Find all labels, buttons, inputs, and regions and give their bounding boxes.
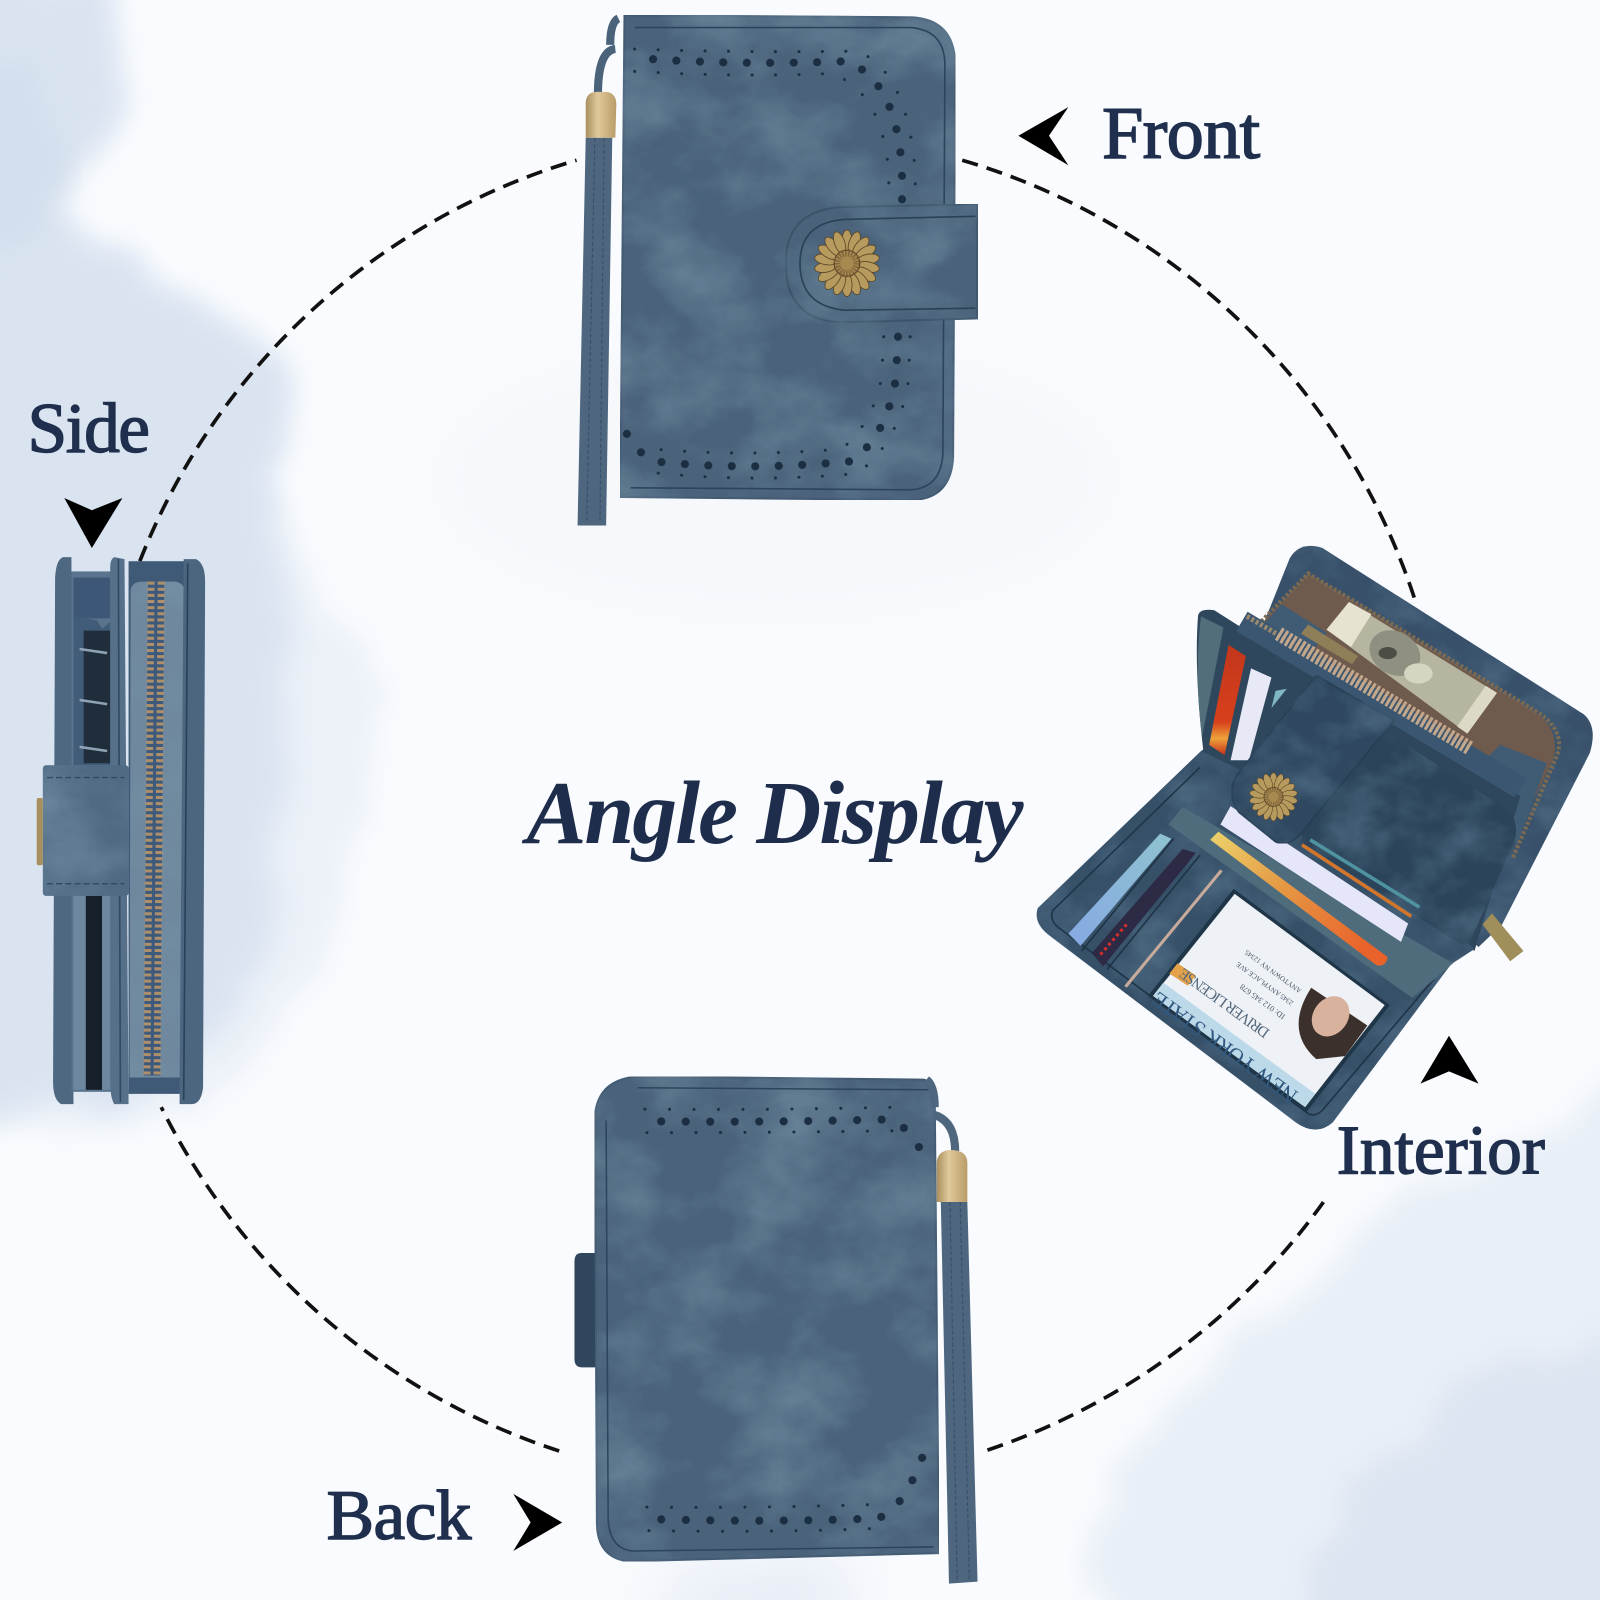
inner zipper band [1242,616,1520,788]
lower panel [1037,751,1474,1130]
closure tab [43,765,129,896]
label: Interior: Interior [1337,1112,1545,1189]
ID window: ANYTOWN NY 12345 [1243,948,1303,995]
wrist strap [927,1080,978,1584]
zip gusset [129,561,188,1094]
ID window: ID: 012 345 678 [1238,982,1287,1021]
sunflower button [814,230,880,297]
blue interior pockets [1263,604,1547,847]
wallet body [595,1077,939,1561]
brogue perforations [645,1107,923,1531]
banknote roll [1327,602,1497,734]
ID window: 2345 ANYPLACE AVE [1235,960,1295,1007]
wallet base under panel [1201,673,1520,951]
brown lining [1263,573,1555,806]
card cavity [71,571,114,1092]
orange card [1210,832,1388,966]
label: Back: Back [327,1476,472,1555]
zipper [147,582,161,1076]
ID window [1147,889,1390,1112]
wallet body [620,15,955,500]
arrow: Front [1018,107,1068,165]
wrist strap [578,18,618,526]
wallet: back view [574,1077,978,1584]
button edge [37,798,43,865]
flap cards [1209,645,1287,760]
wallet: front view [578,15,978,526]
zip pull [1301,624,1358,664]
sunflower button [1249,773,1298,821]
dashed circle connecting the views [140,160,1416,1451]
wallet: side view [37,557,205,1104]
label: Front: Front [1102,93,1261,175]
back shell [1263,546,1593,947]
label: Side: Side [28,389,150,468]
white card [1220,806,1408,942]
arrow: Side [64,498,122,548]
snap tab [1232,676,1394,843]
snap tab [786,204,978,322]
right cover [180,559,205,1104]
lower card slots [1068,834,1221,987]
teal and orange card edges [1302,840,1419,916]
zipper around shell [1261,573,1559,859]
arrow: Back [513,1494,562,1551]
brogue perforations [624,49,915,478]
ID window: DRIVER LICENSE [1176,964,1273,1041]
arrow: Interior [1420,1036,1479,1084]
spine [110,557,129,1104]
ID window: NEW YORK STATE [1147,987,1302,1108]
pull tab [1483,913,1523,961]
lower card strip [1168,807,1453,998]
upper-left flap [1197,610,1327,816]
wallet: interior view [1037,546,1593,1130]
front pocket [1301,694,1516,944]
left cover [53,557,73,1104]
title: Angle Display [522,764,1025,863]
tab stub [574,1253,604,1367]
